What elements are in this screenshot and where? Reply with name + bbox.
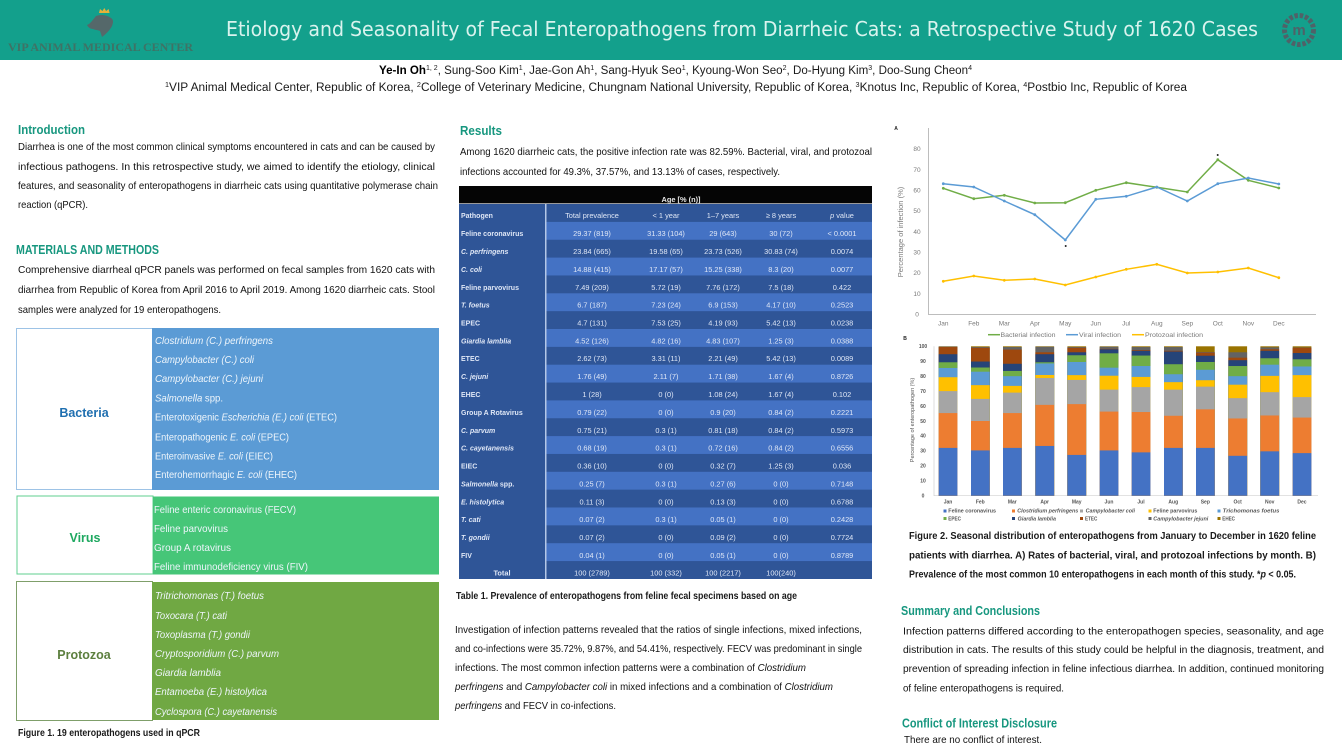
panel: protozoa: Toxocara (T.) cati — [155, 610, 228, 622]
authors: , Do-Hyung Kim — [787, 65, 868, 77]
y axis labels: 0 — [915, 312, 919, 318]
table: prevalence by age: 0.07 (2) — [579, 515, 605, 524]
table: prevalence by age: Giardia lamblia — [461, 338, 511, 346]
authors: , Kyoung-Won Seo — [686, 65, 783, 77]
table: prevalence by age: 0.79 (22) — [577, 408, 607, 417]
table: prevalence by age: 3.31 (11) — [651, 354, 681, 363]
table: prevalence by age: 0.036 — [833, 462, 851, 470]
y axis labels: 40 — [920, 434, 926, 440]
table: prevalence by age: 0.2221 — [831, 408, 853, 417]
table: prevalence by age: 6.9 (153) — [708, 300, 738, 310]
table: prevalence by age: 0.3 (1) — [655, 515, 677, 524]
chart B: enteropathogen prevalence stacked bars — [903, 336, 1318, 522]
table row: header: Pathogen — [461, 213, 493, 220]
table: prevalence by age: 14.88 (415) — [573, 265, 611, 274]
logo: university seal: m — [1292, 22, 1306, 39]
x axis months: Nov — [1243, 320, 1255, 328]
table: prevalence by age: 100 (332) — [650, 568, 682, 578]
table: prevalence by age: 0.11 (3) — [580, 498, 604, 506]
table: prevalence by age: T. foetus — [461, 302, 490, 310]
table: prevalence by age: 4.7 (131) — [577, 318, 607, 328]
panel: introduction — [18, 122, 438, 211]
table row: header: p value — [829, 211, 854, 220]
title: Etiology and Seasonality of Fecal Enteropathogens from Diarrheic Cats: a Retrospective Study of 1620 Cases — [226, 17, 1258, 41]
table: prevalence by age: 7.23 (24) — [651, 300, 681, 310]
table: prevalence by age: 7.49 (209) — [575, 283, 609, 292]
y axis labels: 80 — [920, 374, 926, 380]
text: conflict statement: There are no conflict of interest. — [904, 734, 1042, 746]
table: prevalence by age: 0.3 (1) — [655, 444, 677, 452]
text: infection patterns: perfringens and Campylobacter coli in mixed infections and a combination of Clostridium — [454, 681, 833, 693]
table: prevalence by age: 0.84 (2) — [768, 444, 794, 452]
table: prevalence by age: Group A Rotavirus — [461, 410, 523, 417]
table: prevalence by age: 0.2523 — [831, 300, 853, 310]
table: prevalence by age: 0.27 (6) — [710, 480, 736, 488]
x axis months: Jul — [1137, 500, 1145, 506]
text: summary body: distribution in cats. The results of this study could be helpful in the diagnosis, treatment, and — [903, 644, 1324, 656]
x axis months: Mar — [999, 320, 1011, 328]
table: prevalence by age: 0.0089 — [831, 354, 853, 363]
table: prevalence by age: 0.7724 — [831, 533, 853, 542]
table: prevalence by age: 30 (72) — [769, 229, 793, 238]
panel: protozoa: Entamoeba (E.) histolytica — [155, 686, 267, 698]
stacked bars — [939, 346, 1311, 496]
legend: Bacterial infection — [1000, 332, 1056, 339]
panel: bacteria: Bacteria — [59, 406, 110, 420]
table row: header: Total prevalence — [565, 211, 619, 220]
x axis months: Jun — [1105, 500, 1113, 506]
panel: bacteria: Enterotoxigenic Escherichia (E.) coli (ETEC) — [155, 412, 337, 424]
table: prevalence by age: FIV — [461, 553, 472, 560]
y axis title: Percentage of enteropathogen (%) — [910, 378, 916, 462]
line: bacterial infection — [943, 160, 1279, 203]
table: prevalence by age: 0 (0) — [658, 498, 674, 506]
y axis labels: 20 — [920, 464, 926, 470]
table: prevalence by age: 4.17 (10) — [766, 300, 796, 310]
text: summary body: of feline enteropathogens is required. — [903, 682, 1064, 694]
table: prevalence by age: 0.13 (3) — [710, 498, 736, 506]
table: prevalence by age: 0.422 — [833, 283, 851, 292]
legend — [988, 332, 1203, 339]
table: prevalence by age: 0.68 (19) — [577, 444, 607, 452]
table: prevalence by age: 0 (0) — [658, 551, 674, 560]
significance markers — [1065, 154, 1219, 247]
y axis labels: 20 — [913, 270, 921, 277]
table: prevalence by age: 6.7 (187) — [577, 300, 607, 310]
authors: , Sung-Soo Kim — [438, 65, 519, 77]
panel: bacteria: Campylobacter (C.) jejuni — [155, 373, 264, 385]
table: prevalence by age: 0 (0) — [773, 498, 789, 506]
y axis labels: 10 — [913, 291, 921, 298]
x axis months — [938, 320, 1285, 328]
legend: Campylobacter jejuni — [1153, 516, 1209, 522]
panel: bacteria: Campylobacter (C.) coli — [155, 354, 255, 366]
x axis months: Feb — [968, 320, 980, 328]
table row: header — [461, 211, 854, 220]
table: prevalence by age: 4.52 (126) — [575, 336, 609, 346]
x axis months: Dec — [1297, 500, 1307, 506]
legend: Giardia lamblia — [1018, 516, 1056, 522]
table: prevalence by age: 29 (643) — [709, 229, 737, 238]
x axis months: Sep — [1201, 500, 1210, 506]
table: prevalence by age: 0.72 (16) — [708, 444, 738, 452]
figure 2 caption: patients with diarrhea. A) Rates of bacterial, viral, and protozoal infections by month. B) — [909, 550, 1316, 562]
y axis labels: 30 — [913, 250, 921, 256]
table: prevalence by age: 30.83 (74) — [764, 247, 798, 256]
panel: virus: Virus — [69, 531, 101, 545]
y axis labels: 70 — [913, 167, 921, 174]
panel: virus — [17, 496, 439, 574]
y axis labels: 70 — [920, 389, 926, 395]
x axis months: Aug — [1151, 320, 1163, 328]
panel: protozoa: Cyclospora (C.) cayetanensis — [155, 706, 278, 718]
affiliations: 3 — [856, 82, 860, 89]
authors: 3 — [868, 65, 872, 72]
text: infection patterns: perfringens and FECV in co-infections. — [454, 700, 616, 712]
table: prevalence by age: 5.42 (13) — [766, 318, 796, 328]
table: prevalence by age: Salmonella spp. — [461, 482, 514, 488]
authors: 1 — [682, 65, 686, 72]
table: prevalence by age: 1.67 (4) — [768, 372, 794, 381]
x axis months: Jul — [1122, 320, 1131, 328]
legend: Viral infection — [1079, 332, 1121, 339]
heading: results: Results — [460, 123, 502, 138]
y axis labels: 50 — [913, 208, 921, 215]
logo: university seal — [1284, 16, 1314, 44]
affiliations: 4 — [1023, 82, 1027, 89]
table: prevalence by age: 0 (0) — [658, 408, 674, 417]
table: prevalence by age: 0.3 (1) — [655, 480, 677, 488]
table: prevalence by age: 0 (0) — [658, 533, 674, 542]
panel: virus: Feline parvovirus — [154, 523, 228, 535]
table: prevalence by age: 0.9 (20) — [710, 408, 736, 417]
affiliations: 1 — [165, 82, 169, 89]
table: prevalence by age: 0.0388 — [831, 336, 853, 346]
table: prevalence by age: 1.67 (4) — [768, 390, 794, 399]
affiliations: 2 — [417, 82, 421, 89]
header banner — [0, 0, 1342, 60]
text: methods body: diarrhea from Republic of Korea from April 2016 to April 2019. Among 1620 diarrheic cats. Stool — [18, 284, 435, 296]
panel: protozoa: Cryptosporidium (C.) parvum — [155, 648, 279, 660]
panel: protozoa: Giardia lamblia — [155, 667, 221, 679]
legend: ETEC — [1085, 516, 1098, 522]
line: viral infection — [943, 178, 1279, 240]
y axis labels: 0 — [922, 494, 925, 500]
table: prevalence by age: 7.53 (25) — [651, 318, 681, 328]
table 1 caption: Table 1. Prevalence of enteropathogens from feline fecal specimens based on age — [456, 590, 797, 602]
text: infection patterns: Investigation of infection patterns revealed that the ratios of single infections, mixed infections, — [455, 624, 862, 636]
legend — [944, 509, 1280, 522]
table: prevalence by age: ETEC — [461, 356, 480, 363]
table: prevalence by age: 2.21 (49) — [708, 354, 738, 363]
table: prevalence by age: C. parvum — [461, 428, 495, 435]
table: prevalence by age: 0.5973 — [831, 426, 853, 435]
x axis months: Jan — [938, 320, 949, 328]
table: prevalence by age: 0.7148 — [831, 480, 853, 488]
table: prevalence by age: 1.25 (3) — [768, 336, 794, 346]
text: introduction body: Diarrhea is one of the most common clinical symptoms encountered in cats and can be caused by — [18, 141, 436, 153]
figure 2 caption: Prevalence of the most common 10 enteropathogens in each month of this study. *p < 0.05. — [909, 568, 1296, 580]
panel: bacteria: Enteropathogenic E. coli (EPEC) — [155, 432, 289, 444]
text: introduction body: features, and seasonality of enteropathogens in diarrheic cats using quantitative polymerase chain — [18, 180, 438, 192]
table: prevalence by age: 31.33 (104) — [647, 229, 685, 238]
table: prevalence by age: 23.84 (665) — [573, 247, 611, 256]
table: prevalence by age: 100 (2217) — [705, 568, 741, 578]
affiliations: College of Veterinary Medicine, Chungnam National University, Republic of Korea, — [421, 82, 856, 94]
table: prevalence by age: 0 (0) — [658, 390, 674, 399]
logo: VIP Animal Medical Center — [8, 8, 193, 54]
text: introduction body — [18, 141, 438, 211]
y axis labels — [919, 344, 927, 500]
panel: virus: Group A rotavirus — [154, 542, 231, 554]
text: summary body — [903, 626, 1324, 694]
text: infection patterns: and co-infections were 35.72%, 9.87%, and 54.41%, respectively. FECV was predominant in single — [455, 643, 862, 655]
table: prevalence by age: 4.82 (16) — [651, 336, 681, 346]
legend: EPEC — [948, 516, 961, 522]
authors: , Sang-Hyuk Seo — [594, 65, 682, 77]
table: prevalence by age: 0.04 (1) — [579, 551, 605, 560]
table: prevalence by age: 0.6788 — [831, 498, 853, 506]
table: prevalence by age: C. cayetanensis — [461, 446, 514, 452]
table: prevalence by age: 0.3 (1) — [655, 426, 677, 435]
table: prevalence by age: C. perfringens — [461, 249, 509, 256]
table: prevalence by age: 0.84 (2) — [768, 408, 794, 417]
table: prevalence by age: 7.5 (18) — [768, 283, 794, 292]
table: prevalence by age: 1.25 (3) — [768, 462, 794, 470]
table: prevalence by age: EHEC — [461, 392, 480, 399]
table: prevalence by age: Total — [493, 568, 511, 578]
authors: 4 — [968, 65, 972, 72]
table: prevalence by age — [459, 186, 872, 579]
table: prevalence by age: 0.6556 — [831, 444, 853, 452]
table: prevalence by age: 0.102 — [833, 390, 851, 399]
table: prevalence by age: 0.84 (2) — [768, 426, 794, 435]
table: prevalence by age: 1.71 (38) — [708, 372, 738, 381]
x axis months: Sep — [1182, 320, 1193, 328]
table row: header: < 1 year — [653, 211, 680, 220]
text: results summary: Among 1620 diarrheic cats, the positive infection rate was 82.59%. Bacterial, viral, and protozoal — [460, 146, 872, 158]
table: prevalence by age: 100(240) — [766, 568, 796, 578]
authors: , Jae-Gon Ah — [523, 65, 590, 77]
heading: materials and methods: MATERIALS AND METHODS — [16, 242, 159, 257]
legend: Feline parvovirus — [1153, 509, 1198, 515]
y axis labels: 60 — [913, 188, 921, 194]
text: summary body: Infection patterns differed according to the enteropathogen species, seasonality, and age — [903, 626, 1324, 638]
table: prevalence by age: Feline parvovirus — [461, 285, 519, 292]
text: methods body: Comprehensive diarrheal qPCR panels was performed on fecal samples from 1620 cats with — [18, 264, 435, 276]
y axis labels: 90 — [920, 359, 926, 365]
table: prevalence by age: < 0.0001 — [828, 229, 856, 238]
figure 1 caption: Figure 1. 19 enteropathogens used in qPCR — [18, 727, 200, 739]
table row: header: 1–7 years — [707, 211, 740, 220]
heading: introduction: Introduction — [18, 122, 85, 137]
table: prevalence by age: 5.42 (13) — [766, 354, 796, 363]
y axis labels — [913, 146, 921, 318]
table: prevalence by age: Feline coronavirus — [461, 231, 523, 238]
table: prevalence by age: 0.07 (2) — [579, 533, 605, 542]
table: prevalence by age: 0 (0) — [773, 551, 789, 560]
table: prevalence by age: C. coli — [461, 267, 483, 274]
table: prevalence by age: 5.72 (19) — [651, 283, 681, 292]
table: prevalence by age: 0.0074 — [831, 247, 853, 256]
table: prevalence by age: 0.09 (2) — [710, 533, 736, 542]
text: infection patterns: infections. The most common infection patterns were a combination of Clostridium — [455, 662, 806, 674]
table: prevalence by age: 0 (0) — [773, 480, 789, 488]
affiliations: Knotus Inc, Republic of Korea, — [860, 82, 1023, 94]
table: prevalence by age: 0 (0) — [773, 533, 789, 542]
authors: , Doo-Sung Cheon — [872, 65, 968, 77]
x axis months: Apr — [1030, 320, 1041, 328]
table: prevalence by age: EIEC — [461, 464, 477, 470]
text: introduction body: infectious pathogens. In this retrospective study, we aimed to identify the etiology, clinical — [18, 161, 435, 173]
text: summary body: prevention of spreading infection in feline infectious diarrhea. In addition, continued monitoring — [903, 663, 1324, 675]
table: prevalence by age: 1.08 (24) — [708, 390, 738, 399]
y axis title: Percentage of infection (%) — [896, 186, 905, 277]
panel: virus: Feline immunodeficiency virus (FIV) — [154, 561, 308, 573]
affiliations: Postbio Inc, Republic of Korea — [1027, 82, 1188, 94]
line: protozoal infection — [943, 264, 1279, 285]
chart B: enteropathogen prevalence stacked bars: B — [903, 336, 907, 342]
table: prevalence by age: C. jejuni — [461, 374, 489, 381]
panel: bacteria: Clostridium (C.) perfringens — [155, 335, 274, 347]
table: prevalence by age: T. cati — [461, 517, 482, 524]
x axis months: Oct — [1234, 500, 1242, 506]
x axis months — [944, 500, 1307, 506]
x axis months: May — [1059, 320, 1072, 328]
logo: VIP Animal Medical Center: VIP ANIMAL MEDICAL CENTER — [8, 40, 193, 54]
table: prevalence by age: 15.25 (338) — [704, 265, 742, 274]
text: introduction body: reaction (qPCR). — [18, 199, 88, 211]
panel: bacteria: Salmonella spp. — [155, 392, 223, 404]
y axis labels: 10 — [920, 478, 926, 484]
y axis labels: 80 — [913, 146, 921, 153]
legend: Feline coronavirus — [948, 509, 996, 515]
x axis months: Oct — [1213, 320, 1223, 328]
x axis months: Jan — [944, 500, 952, 506]
text: methods body — [18, 264, 435, 316]
table: prevalence by age: 0.0238 — [831, 318, 853, 328]
table row: header: ≥ 8 years — [766, 211, 796, 220]
heading: conflict of interest: Conflict of Interest Disclosure — [902, 716, 1057, 730]
panel: bacteria — [16, 328, 439, 490]
heading: summary and conclusions: Summary and Conclusions — [901, 603, 1040, 618]
table: prevalence by age: 0.36 (10) — [577, 462, 607, 470]
table: prevalence by age: 29.37 (819) — [573, 229, 611, 238]
figure 2 caption — [909, 530, 1316, 580]
table: prevalence by age: 4.83 (107) — [706, 336, 740, 346]
panel: protozoa: Toxoplasma (T.) gondii — [155, 629, 251, 641]
y axis labels: 60 — [920, 404, 926, 410]
table: prevalence by age: E. histolytica — [461, 500, 504, 506]
legend: Protozoal infection — [1145, 332, 1203, 339]
table: prevalence by age: 0.32 (7) — [710, 462, 736, 470]
panel: bacteria: Enterohemorrhagic E. coli (EHEC) — [155, 469, 297, 481]
table: prevalence by age: 0.25 (7) — [579, 480, 605, 488]
table: prevalence by age: 17.17 (57) — [649, 265, 683, 274]
authors: 1 — [590, 65, 594, 72]
table: prevalence by age: 2.11 (7) — [654, 372, 678, 381]
table: prevalence by age: 0 (0) — [773, 515, 789, 524]
y axis labels: 100 — [919, 344, 927, 350]
panel: protozoa: Protozoa — [57, 648, 112, 662]
table: prevalence by age: 2.62 (73) — [577, 354, 607, 363]
table: prevalence by age: 1 (28) — [582, 390, 602, 399]
table: prevalence by age: 0.81 (18) — [708, 426, 738, 435]
table: prevalence by age: 0.05 (1) — [710, 515, 736, 524]
legend: Campylobacter coli — [1086, 509, 1136, 515]
chart A: infection rates by month: A — [894, 126, 898, 132]
x axis months: Feb — [976, 500, 985, 506]
x axis months: Jun — [1091, 320, 1101, 328]
authors: 1, 2 — [426, 65, 438, 72]
table: prevalence by age: 4.19 (93) — [708, 318, 738, 328]
table: prevalence by age: 0 (0) — [658, 462, 674, 470]
y axis labels: 40 — [913, 229, 921, 236]
x axis months: Dec — [1273, 320, 1285, 328]
table: prevalence by age: 0.75 (21) — [577, 426, 607, 435]
x axis months: Mar — [1008, 500, 1017, 506]
chart A: infection rates by month — [894, 126, 1316, 339]
panel: protozoa — [16, 582, 439, 720]
panel: virus: Feline enteric coronavirus (FECV) — [154, 504, 296, 516]
table: prevalence by age: 8.3 (20) — [768, 265, 794, 274]
affiliations: VIP Animal Medical Center, Republic of Korea, — [169, 82, 417, 94]
table: prevalence by age: 0.8789 — [831, 551, 853, 560]
legend: EHEC — [1222, 516, 1235, 522]
panel: protozoa: Tritrichomonas (T.) foetus — [155, 590, 265, 602]
y axis labels: 50 — [920, 419, 926, 425]
x axis months: May — [1072, 500, 1082, 506]
table: prevalence by age: 0.2428 — [831, 515, 853, 524]
x axis months: Nov — [1265, 500, 1275, 506]
table: prevalence by age: T. gondii — [461, 535, 491, 542]
text: methods body: samples were analyzed for 19 enteropathogens. — [18, 304, 221, 316]
table: prevalence by age: 0.0077 — [831, 265, 853, 274]
legend: Clostridium perfringens — [1017, 509, 1079, 515]
table: prevalence by age: 7.76 (172) — [706, 283, 740, 292]
table: prevalence by age: 100 (2789) — [574, 568, 610, 578]
table: prevalence by age: 1.76 (49) — [577, 372, 607, 381]
legend: Trichomonas foetus — [1223, 509, 1280, 515]
text: infection patterns — [454, 624, 862, 712]
table: prevalence by age: 19.58 (65) — [649, 247, 683, 256]
authors: Ye-In Oh — [379, 65, 426, 77]
table: prevalence by age: Age [% (n)] — [662, 195, 701, 204]
y axis labels: 30 — [920, 449, 926, 455]
text: results summary: infections accounted for 49.3%, 37.57%, and 13.13% of cases, respectively. — [460, 166, 780, 178]
text: results summary — [460, 146, 872, 178]
panel: bacteria: Enteroinvasive E. coli (EIEC) — [155, 450, 273, 462]
table: prevalence by age: EPEC — [461, 320, 480, 328]
authors: 1 — [519, 65, 523, 72]
authors: 2 — [783, 65, 787, 72]
x axis months: Apr — [1040, 500, 1049, 506]
table: prevalence by age: 0.05 (1) — [710, 551, 736, 560]
x axis months: Aug — [1168, 500, 1178, 506]
panel: materials and methods — [16, 242, 435, 316]
table: prevalence by age: 23.73 (526) — [704, 247, 742, 256]
table: prevalence by age: 0.8726 — [831, 372, 853, 381]
